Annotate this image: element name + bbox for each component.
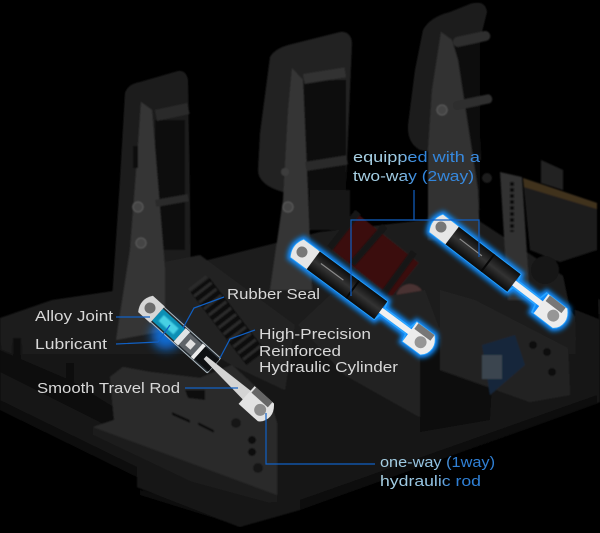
label: High-Precision Reinforced Hydraulic Cylinder [259, 326, 398, 376]
hydraulic rod: left (one-way, cutaway) [127, 292, 278, 434]
label: Lubricant: Lubricant [35, 336, 108, 353]
label: Rubber Seal: Rubber Seal [227, 286, 320, 303]
label: High-Precision Reinforced Hydraulic Cylinder: Reinforced [259, 343, 341, 360]
hydraulic rod: right (two-way) [426, 212, 572, 331]
label: Smooth Travel Rod: Smooth Travel Rod [37, 380, 180, 397]
label: Alloy Joint: Alloy Joint [35, 308, 114, 325]
label: equipped with a two-way (2way): equipped with a [353, 149, 481, 166]
rubber seal spring [197, 282, 256, 358]
base plate [0, 215, 600, 527]
left pedal [110, 71, 191, 340]
gusset behind spring [165, 255, 295, 390]
label: equipped with a two-way (2way): two-way (2way) [353, 168, 474, 185]
label: one-way (1way) hydraulic rod [380, 454, 495, 490]
centre bracket and block [298, 290, 570, 432]
label: one-way (1way) hydraulic rod: one-way (1way) [380, 454, 495, 471]
right sensor housing [482, 160, 600, 390]
label: High-Precision Reinforced Hydraulic Cylinder: High-Precision [259, 326, 371, 343]
label: one-way (1way) hydraulic rod: hydraulic rod [380, 473, 481, 490]
label: equipped with a two-way (2way) [353, 149, 481, 185]
hydraulic rod: middle (two-way) [287, 237, 439, 358]
left pedal bracket [93, 365, 277, 527]
middle pedal [258, 32, 352, 290]
label: High-Precision Reinforced Hydraulic Cylinder: Hydraulic Cylinder [259, 359, 398, 376]
right pedal [408, 3, 493, 240]
red master cylinder [330, 212, 424, 312]
leader lines [116, 190, 479, 464]
